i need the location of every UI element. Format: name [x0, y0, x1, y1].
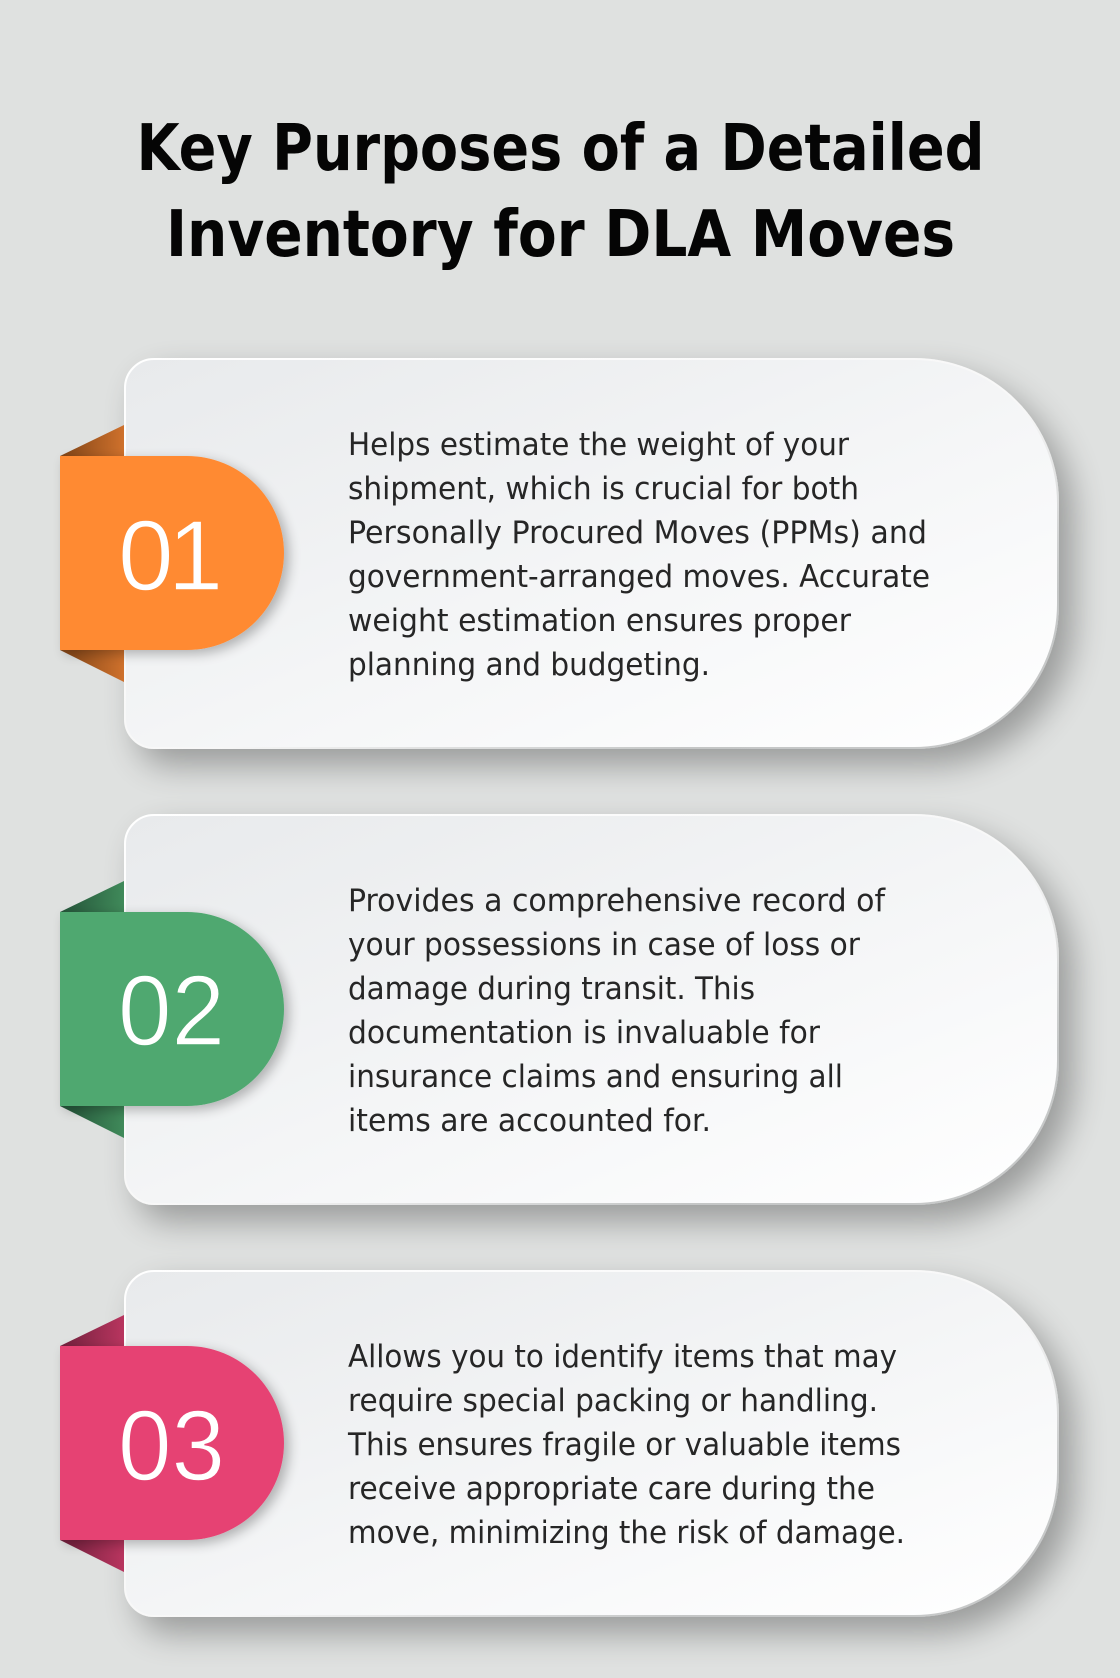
title: Inventory for DLA Moves [166, 198, 955, 272]
number 01: 01 [118, 500, 219, 612]
title: Key Purposes of a Detailed [136, 112, 984, 186]
text block 03: move, minimizing the risk of damage. [348, 1515, 905, 1551]
ribbon fold top 03 [60, 1315, 124, 1346]
card 02 background [125, 815, 1058, 1204]
text block 03: This ensures fragile or valuable items [347, 1427, 901, 1463]
text block 02: Provides a comprehensive record of [348, 883, 886, 919]
number 02: 02 [118, 955, 225, 1067]
title [136, 112, 984, 272]
ribbon fold top 01 [60, 425, 124, 456]
text block 02: items are accounted for. [348, 1103, 711, 1139]
number badge 02 [60, 912, 284, 1106]
ribbon fold bottom 01 [60, 650, 124, 682]
text block 03: Allows you to identify items that may [348, 1339, 897, 1375]
text block 01: planning and budgeting. [348, 647, 710, 683]
number badge 01 [60, 456, 284, 650]
text block 02: documentation is invaluable for [348, 1015, 820, 1051]
text block 02: your possessions in case of loss or [348, 927, 860, 963]
panel: step 03 [60, 1271, 1058, 1616]
ribbon fold top 02 [60, 881, 124, 912]
text block 01: Personally Procured Moves (PPMs) and [348, 515, 927, 551]
text block 02: insurance claims and ensuring all [348, 1059, 843, 1095]
number 03: 03 [118, 1390, 225, 1502]
text block 01: government-arranged moves. Accurate [348, 559, 930, 595]
card 03 background [125, 1271, 1058, 1616]
ribbon fold bottom 03 [60, 1540, 124, 1572]
text block 02: damage during transit. This [348, 971, 755, 1007]
text block 01 [348, 427, 930, 683]
text block 03: require special packing or handling. [348, 1383, 878, 1419]
text block 01: Helps estimate the weight of your [348, 427, 849, 463]
text block 01: shipment, which is crucial for both [348, 471, 859, 507]
text block 01: weight estimation ensures proper [348, 603, 851, 639]
text block 03: receive appropriate care during the [348, 1471, 875, 1507]
number badge 03 [60, 1346, 284, 1540]
panel: step 02 [60, 815, 1058, 1204]
panel: step 01 [60, 359, 1058, 748]
text block 03 [347, 1339, 905, 1551]
card 01 background [125, 359, 1058, 748]
ribbon fold bottom 02 [60, 1106, 124, 1138]
text block 02 [348, 883, 886, 1139]
